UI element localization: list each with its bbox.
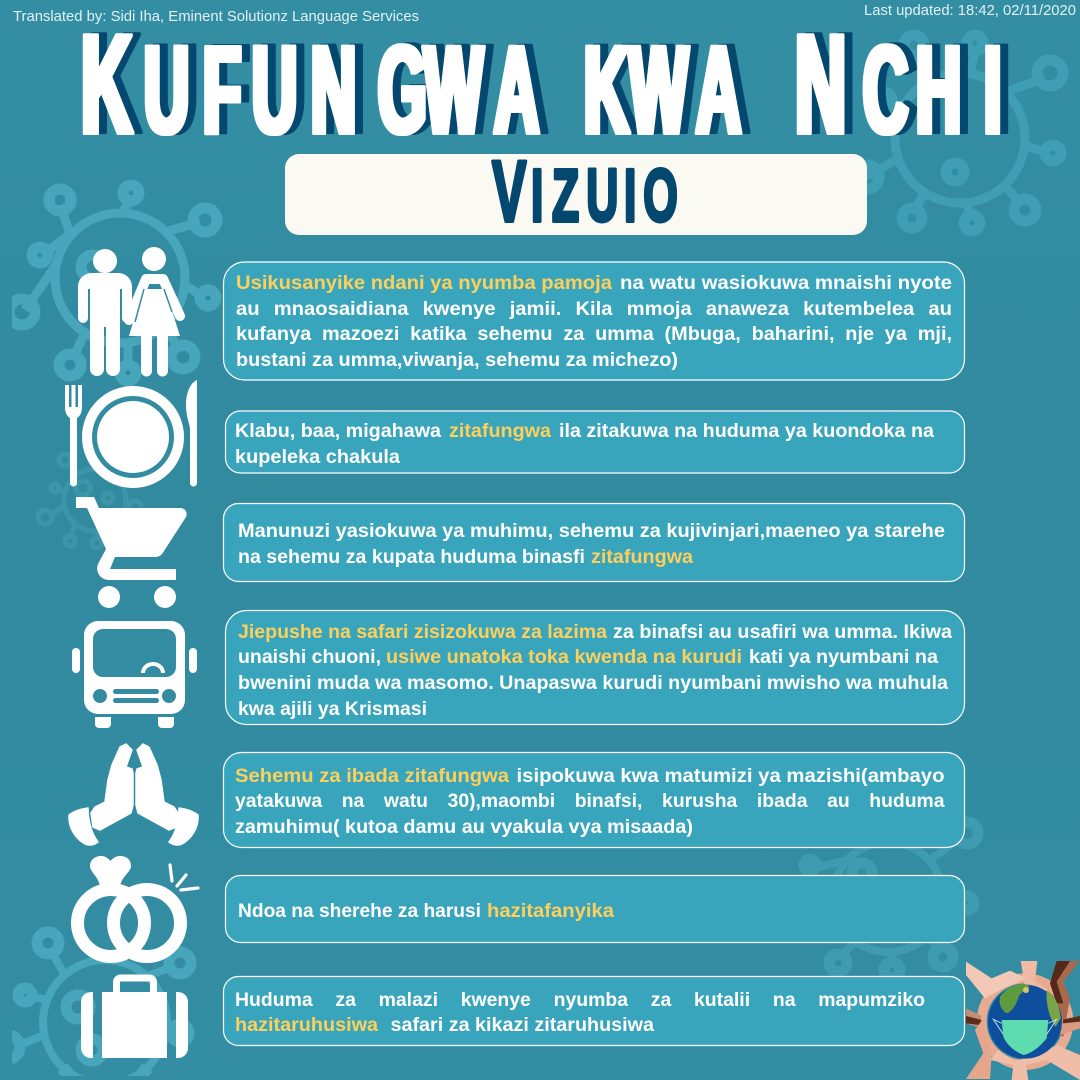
icon: shopping cart [76,497,187,608]
panel: shopping: zitafungwa [591,547,693,568]
panel: travel: za binafsi au usafiri wa umma. Ikiwa [613,622,952,643]
panel: travel [226,610,964,724]
panel: gatherings: Usikusanyike ndani ya nyumba pamoja [236,273,612,294]
title: KUFUNGWA KWA NCHI [81,4,1001,163]
panel: gatherings: au mnaosaidiana kwenye jamii. Kila mmoja anaweza kutembelea au [236,299,952,320]
panel: gatherings: na watu wasiokuwa mnaishi nyote [620,273,952,294]
last updated: Last updated: 18:42, 02/11/2020 [864,2,1076,19]
panel: shopping [224,504,964,582]
icon: bus [72,621,197,728]
panel: restaurants: Klabu, baa, migahawa [235,421,441,442]
icon: praying hands [69,744,198,845]
virus: lower left [0,932,191,1080]
panel: travel: kwa ajili ya Krismasi [238,699,427,720]
panel: restaurants: ila zitakuwa na huduma ya kuondoka na [559,421,934,442]
icon: plate and cutlery [65,380,197,488]
panel: shopping: na sehemu za kupata huduma binasfi [238,547,585,568]
panel: travel: usiwe unatoka toka kwenda na kurudi [386,647,742,668]
virus: lower right [804,822,978,978]
panel: weddings: hazitafanyika [487,901,614,922]
panel: restaurants: kupeleka chakula [235,447,400,468]
icon: hands around masked globe [966,961,1080,1080]
panel: travel: unaishi chuoni, [238,647,381,668]
panel: worship [224,752,964,848]
panel: weddings [226,876,964,942]
panel: travel: kati ya nyumbani na [749,647,938,668]
panel: restaurants [226,411,964,473]
panel: travel: Jiepushe na safari zisizokuwa za lazima [238,622,607,643]
panel: weddings: Ndoa na sherehe za harusi [238,901,481,922]
virus: upper left [9,185,217,381]
panel: accommodation [224,976,964,1046]
icon: suitcase [81,978,188,1058]
virus: upper right [855,35,1063,231]
icon: couple [78,247,180,376]
panel: accommodation: safari za kikazi zitaruhusiwa [390,1015,654,1036]
panel: accommodation: hazitaruhusiwa [235,1015,378,1036]
icon: wedding rings [78,856,198,956]
virus: small left [38,454,141,548]
panel: gatherings: kufanya mazoezi katika sehemu za umma (Mbuga, baharini, nje ya mji, [236,324,952,345]
panel: gatherings: bustani za umma,viwanja, sehemu za michezo) [236,350,678,371]
panel: accommodation: Huduma za malazi kwenye nyumba za kutalii na mapumziko [235,990,925,1011]
panel: worship: yatakuwa na watu 30),maombi binafsi, kurusha ibada au huduma [235,791,945,812]
panel: worship: isipokuwa kwa matumizi ya mazishi(ambayo [516,766,944,787]
panel: restaurants: zitafungwa [449,421,551,442]
panel: worship: Sehemu za ibada zitafungwa [235,766,509,787]
panel: shopping: Manunuzi yasiokuwa ya muhimu, sehemu za kujivinjari,maeneo ya starehe [238,521,945,542]
subtitle banner: VIZUIO [492,145,678,240]
panel: travel: bwenini muda wa masomo. Unapaswa kurudi nyumbani mwisho wa muhula [238,673,948,694]
translator credit: Translated by: Sidi Iha, Eminent Solutionz Language Services [13,8,419,25]
panel: gatherings [224,262,964,380]
subtitle banner [285,145,867,240]
panel: worship: zamuhimu( kutoa damu au vyakula vya misaada) [235,817,693,838]
